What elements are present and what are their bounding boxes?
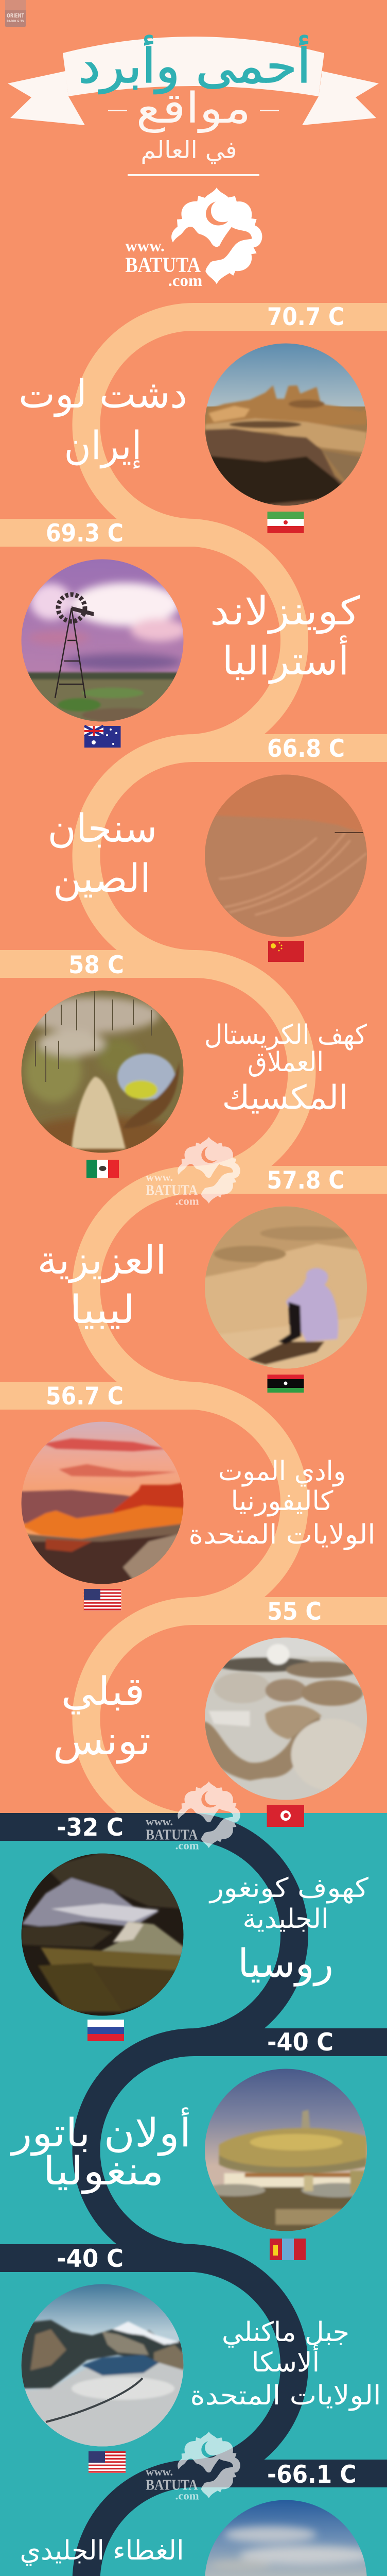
item 6: Death Valley: الولايات المتحدة: [188, 1519, 376, 1550]
item 10: McKinley: -40 C: [57, 2245, 124, 2273]
item 8: Kungur: -32 C: [57, 1814, 124, 1842]
corner watermark: Orient: [5, 0, 26, 27]
watermark logo 3: BATUTA: [146, 2477, 198, 2493]
item 11: Greenland: -66.1 C: [267, 2461, 356, 2489]
item 2: Queensland: 69.3 C: [46, 519, 124, 548]
flag: Libya: [268, 1375, 304, 1393]
item 4: Crystal cave: 58 C: [68, 951, 124, 979]
background: cold half: [0, 1813, 387, 2576]
logo: Batuta: .com: [168, 271, 203, 290]
item 7: Kebili: [53, 1598, 374, 1801]
watermark logo 2: .com: [175, 1839, 199, 1852]
title line 3: في العالم: [141, 136, 237, 164]
item 3: Xinjiang: [47, 735, 368, 962]
item 6: Death Valley: [20, 1382, 376, 1611]
watermark logo 1: .com: [175, 1194, 199, 1207]
background: hot half: [0, 0, 387, 1813]
item 2: Queensland: [20, 519, 361, 748]
photo: cave: [20, 989, 185, 1156]
item 7: Kebili: قبلي: [61, 1668, 145, 1715]
flag: Iran: [268, 512, 304, 533]
photo: Greenland ice: [204, 2499, 374, 2576]
item 10: McKinley: جبل ماكنلي: [222, 2317, 349, 2348]
watermark logo 3: [146, 2432, 240, 2502]
item 11: Greenland: [20, 2461, 374, 2576]
photo: Sahara man: [204, 1205, 368, 1370]
photo: Death Valley: [20, 1420, 185, 1588]
item 4: Crystal cave: العملاق: [248, 1047, 324, 1078]
flag: China: [268, 941, 304, 962]
photo: Zaisan memorial: [204, 2067, 374, 2236]
photo: camels: [204, 1636, 374, 1801]
logo: Batuta: BATUTA: [125, 252, 201, 276]
corner watermark: Orient: RADIO & TV: [7, 20, 24, 23]
flag: Mongolia: [270, 2239, 306, 2260]
title line 2 with dashes: مواقع: [136, 84, 251, 133]
watermark logo 2: www.: [146, 1815, 173, 1828]
photo: Xinjiang dunes: [204, 773, 368, 938]
item 3: Xinjiang: سنجان: [47, 805, 157, 851]
item 5: Aziziya: ليبيا: [70, 1286, 135, 1332]
item 4: Crystal cave: المكسيك: [222, 1079, 348, 1117]
flag: USA: [89, 2451, 126, 2473]
photo: glacier: [20, 2283, 185, 2450]
item 8: Kungur: كهوف كونغور: [208, 1873, 368, 1904]
item 6: Death Valley: كاليفورنيا: [231, 1486, 333, 1517]
item 5: Aziziya: 57.8 C: [267, 1166, 345, 1195]
item 3: Xinjiang: الصين: [53, 855, 151, 902]
photo: windmill: [20, 558, 187, 726]
flag: USA: [84, 1589, 121, 1611]
item 10: McKinley: [20, 2245, 381, 2473]
item 10: McKinley: ألاسكا: [252, 2345, 320, 2378]
item 1: Lut desert: [19, 303, 368, 533]
item 8: Kungur: [20, 1814, 368, 2041]
logo: Batuta: [125, 188, 262, 290]
item 1: Lut desert: 70.7 C: [267, 303, 344, 331]
title line 2 with dashes: [108, 84, 279, 133]
item 1: Lut desert: دشت لوت: [19, 371, 187, 417]
winding path: cold: [0, 1827, 387, 2576]
winding path: hot: [0, 317, 387, 1827]
flag: Australia: [84, 726, 120, 748]
watermark logo 1: [146, 1137, 240, 1207]
watermark logo 3: .com: [175, 2489, 199, 2502]
photo: Lut desert: [204, 342, 368, 510]
item 5: Aziziya: العزيزية: [37, 1237, 167, 1283]
item 1: Lut desert: إيران: [64, 422, 142, 469]
logo: Batuta: www.: [125, 236, 165, 255]
item 3: Xinjiang: 66.8 C: [267, 735, 345, 763]
watermark logo 2: BATUTA: [146, 1827, 198, 1843]
title ribbon: [8, 37, 379, 125]
corner watermark: Orient: ORIENT: [7, 12, 24, 19]
flag: Tunisia: [267, 1805, 304, 1827]
photo: ice cave: [20, 1852, 185, 2017]
item 9: Ulaanbaatar: -40 C: [267, 2028, 333, 2057]
item 4: Crystal cave: كهف الكريستال: [204, 1020, 367, 1050]
flag: Mexico: [86, 1160, 119, 1178]
title line 1: أحمى وأبرد: [78, 35, 311, 94]
item 7: Kebili: 55 C: [267, 1598, 322, 1626]
watermark logo 2: [146, 1782, 240, 1852]
title underline: [128, 174, 259, 176]
watermark logo 1: www.: [146, 1171, 173, 1183]
item 6: Death Valley: وادي الموت: [218, 1456, 346, 1487]
item 5: Aziziya: [37, 1166, 368, 1393]
item 9: Ulaanbaatar: أولان باتور: [9, 2107, 191, 2156]
item 10: McKinley: الولايات المتحدة: [190, 2380, 381, 2411]
item 6: Death Valley: 56.7 C: [46, 1382, 124, 1411]
item 8: Kungur: روسيا: [238, 1940, 333, 1987]
item 2: Queensland: كوينزلاند: [210, 588, 361, 634]
item 7: Kebili: تونس: [53, 1718, 151, 1764]
watermark logo 3: www.: [146, 2465, 173, 2478]
item 4: Crystal cave: [20, 951, 367, 1178]
watermark logo 1: BATUTA: [146, 1182, 198, 1198]
flag: Russia: [87, 2020, 124, 2041]
item 2: Queensland: أستراليا: [222, 635, 349, 684]
item 9: Ulaanbaatar: منغوليا: [43, 2148, 164, 2194]
item 9: Ulaanbaatar: [9, 2028, 373, 2260]
item 8: Kungur: الجليدية: [243, 1904, 328, 1935]
item 11: Greenland: الغطاء الجليدي: [20, 2535, 184, 2566]
